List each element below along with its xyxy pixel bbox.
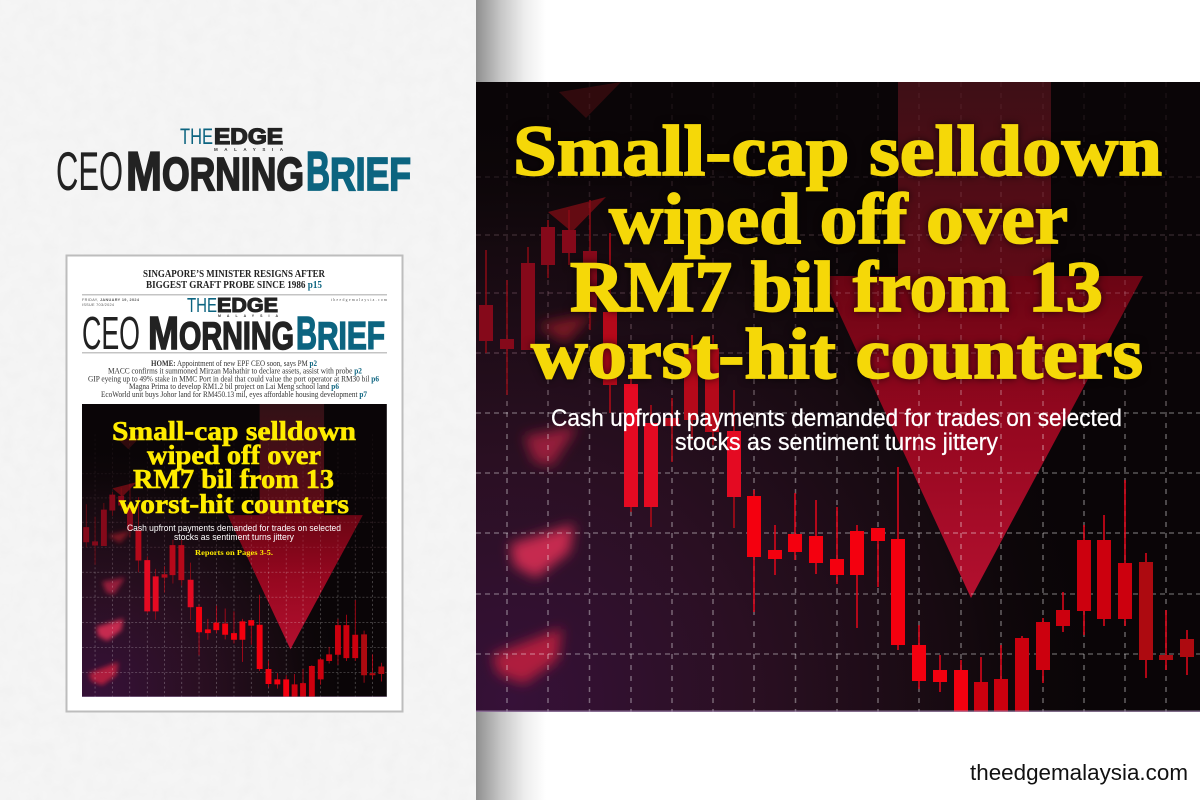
cover masthead: RIEF xyxy=(317,315,385,358)
cover date and issue: ISSUE 703/2024 xyxy=(82,303,114,307)
logo: CEO Morning Brief masthead: B xyxy=(306,140,330,202)
panel: newspaper cover thumbnail xyxy=(66,256,402,712)
page fold shadow xyxy=(476,0,546,800)
logo: The Edge xyxy=(180,124,284,152)
cover news briefs: HOME: Appointment of new EPF CEO soon, says PM p2 xyxy=(151,358,317,368)
cover news briefs: Magna Prima to develop RM1.2 bil project on Lai Meng school land p6 xyxy=(129,381,339,391)
cover main headline: Small-cap selldown xyxy=(112,416,356,446)
cover date and issue: FRIDAY, JANUARY 19, 2024 xyxy=(82,298,140,302)
cover masthead: CEO xyxy=(82,307,140,359)
cover headline: BIGGEST GRAFT PROBE SINCE 1986 p15 xyxy=(146,280,322,291)
cover date and issue xyxy=(82,298,387,307)
main headline: Small-cap selldown xyxy=(513,111,1162,191)
subheading: stocks as sentiment turns jittery xyxy=(675,429,999,456)
cover news briefs: EcoWorld unit buys Johor land for RM450.13 mil, eyes affordable housing development p7 xyxy=(101,389,367,399)
chart: falling candlesticks with down arrow xyxy=(476,82,1200,712)
logo: CEO Morning Brief masthead: CEO xyxy=(56,140,123,202)
logo: The Edge: THE xyxy=(180,124,213,149)
subheading xyxy=(551,405,1122,456)
logo: CEO Morning Brief masthead: ORNING xyxy=(162,148,304,200)
cover subheading xyxy=(127,523,341,543)
logo: CEO Morning Brief masthead: RIEF xyxy=(330,148,411,200)
logo: CEO Morning Brief masthead: M xyxy=(126,140,162,202)
logo: CEO Morning Brief masthead xyxy=(56,124,411,202)
cover subheading: Cash upfront payments demanded for trades on selected xyxy=(127,523,341,534)
cover masthead xyxy=(82,295,385,359)
logo: The Edge: MALAYSIA xyxy=(214,147,284,152)
cover news briefs: GIP eyeing up to 49% stake in MMC Port in deal that could value the port operator at RM30 bil p6 xyxy=(88,374,379,384)
cover masthead: M xyxy=(148,307,179,359)
subheading: Cash upfront payments demanded for trades on selected xyxy=(551,405,1122,432)
cover news briefs xyxy=(88,358,379,399)
logo: The Edge: EDGE xyxy=(214,124,283,149)
cover main headline: wiped off over xyxy=(147,440,321,470)
cover main headline xyxy=(112,416,356,519)
website credit: theedgemalaysia.com xyxy=(970,760,1188,785)
cover date and issue: theedgemalaysia.com xyxy=(331,298,387,302)
main headline: RM7 bil from 13 xyxy=(570,247,1103,327)
main headline xyxy=(513,111,1162,394)
panel: left paper background xyxy=(0,0,476,800)
cover masthead: B xyxy=(296,307,317,359)
cover masthead: EDGE xyxy=(217,295,278,317)
cover headline xyxy=(143,269,325,291)
cover main headline: RM7 bil from 13 xyxy=(133,464,334,494)
main headline: worst-hit counters xyxy=(531,314,1143,394)
cover masthead: THE xyxy=(187,295,217,317)
cover subheading: stocks as sentiment turns jittery xyxy=(174,532,294,543)
cover chart image xyxy=(82,396,387,697)
cover masthead: MALAYSIA xyxy=(218,314,278,318)
cover page reference: Reports on Pages 3-5. xyxy=(195,548,273,557)
cover headline: SINGAPORE’S MINISTER RESIGNS AFTER xyxy=(143,269,325,280)
cover main headline: worst-hit counters xyxy=(119,489,349,519)
main headline: wiped off over xyxy=(609,179,1068,259)
cover news briefs: MACC confirms it summoned Mirzan Mahathir to declare assets, assist with probe p2 xyxy=(108,366,362,376)
cover masthead: ORNING xyxy=(179,315,294,358)
